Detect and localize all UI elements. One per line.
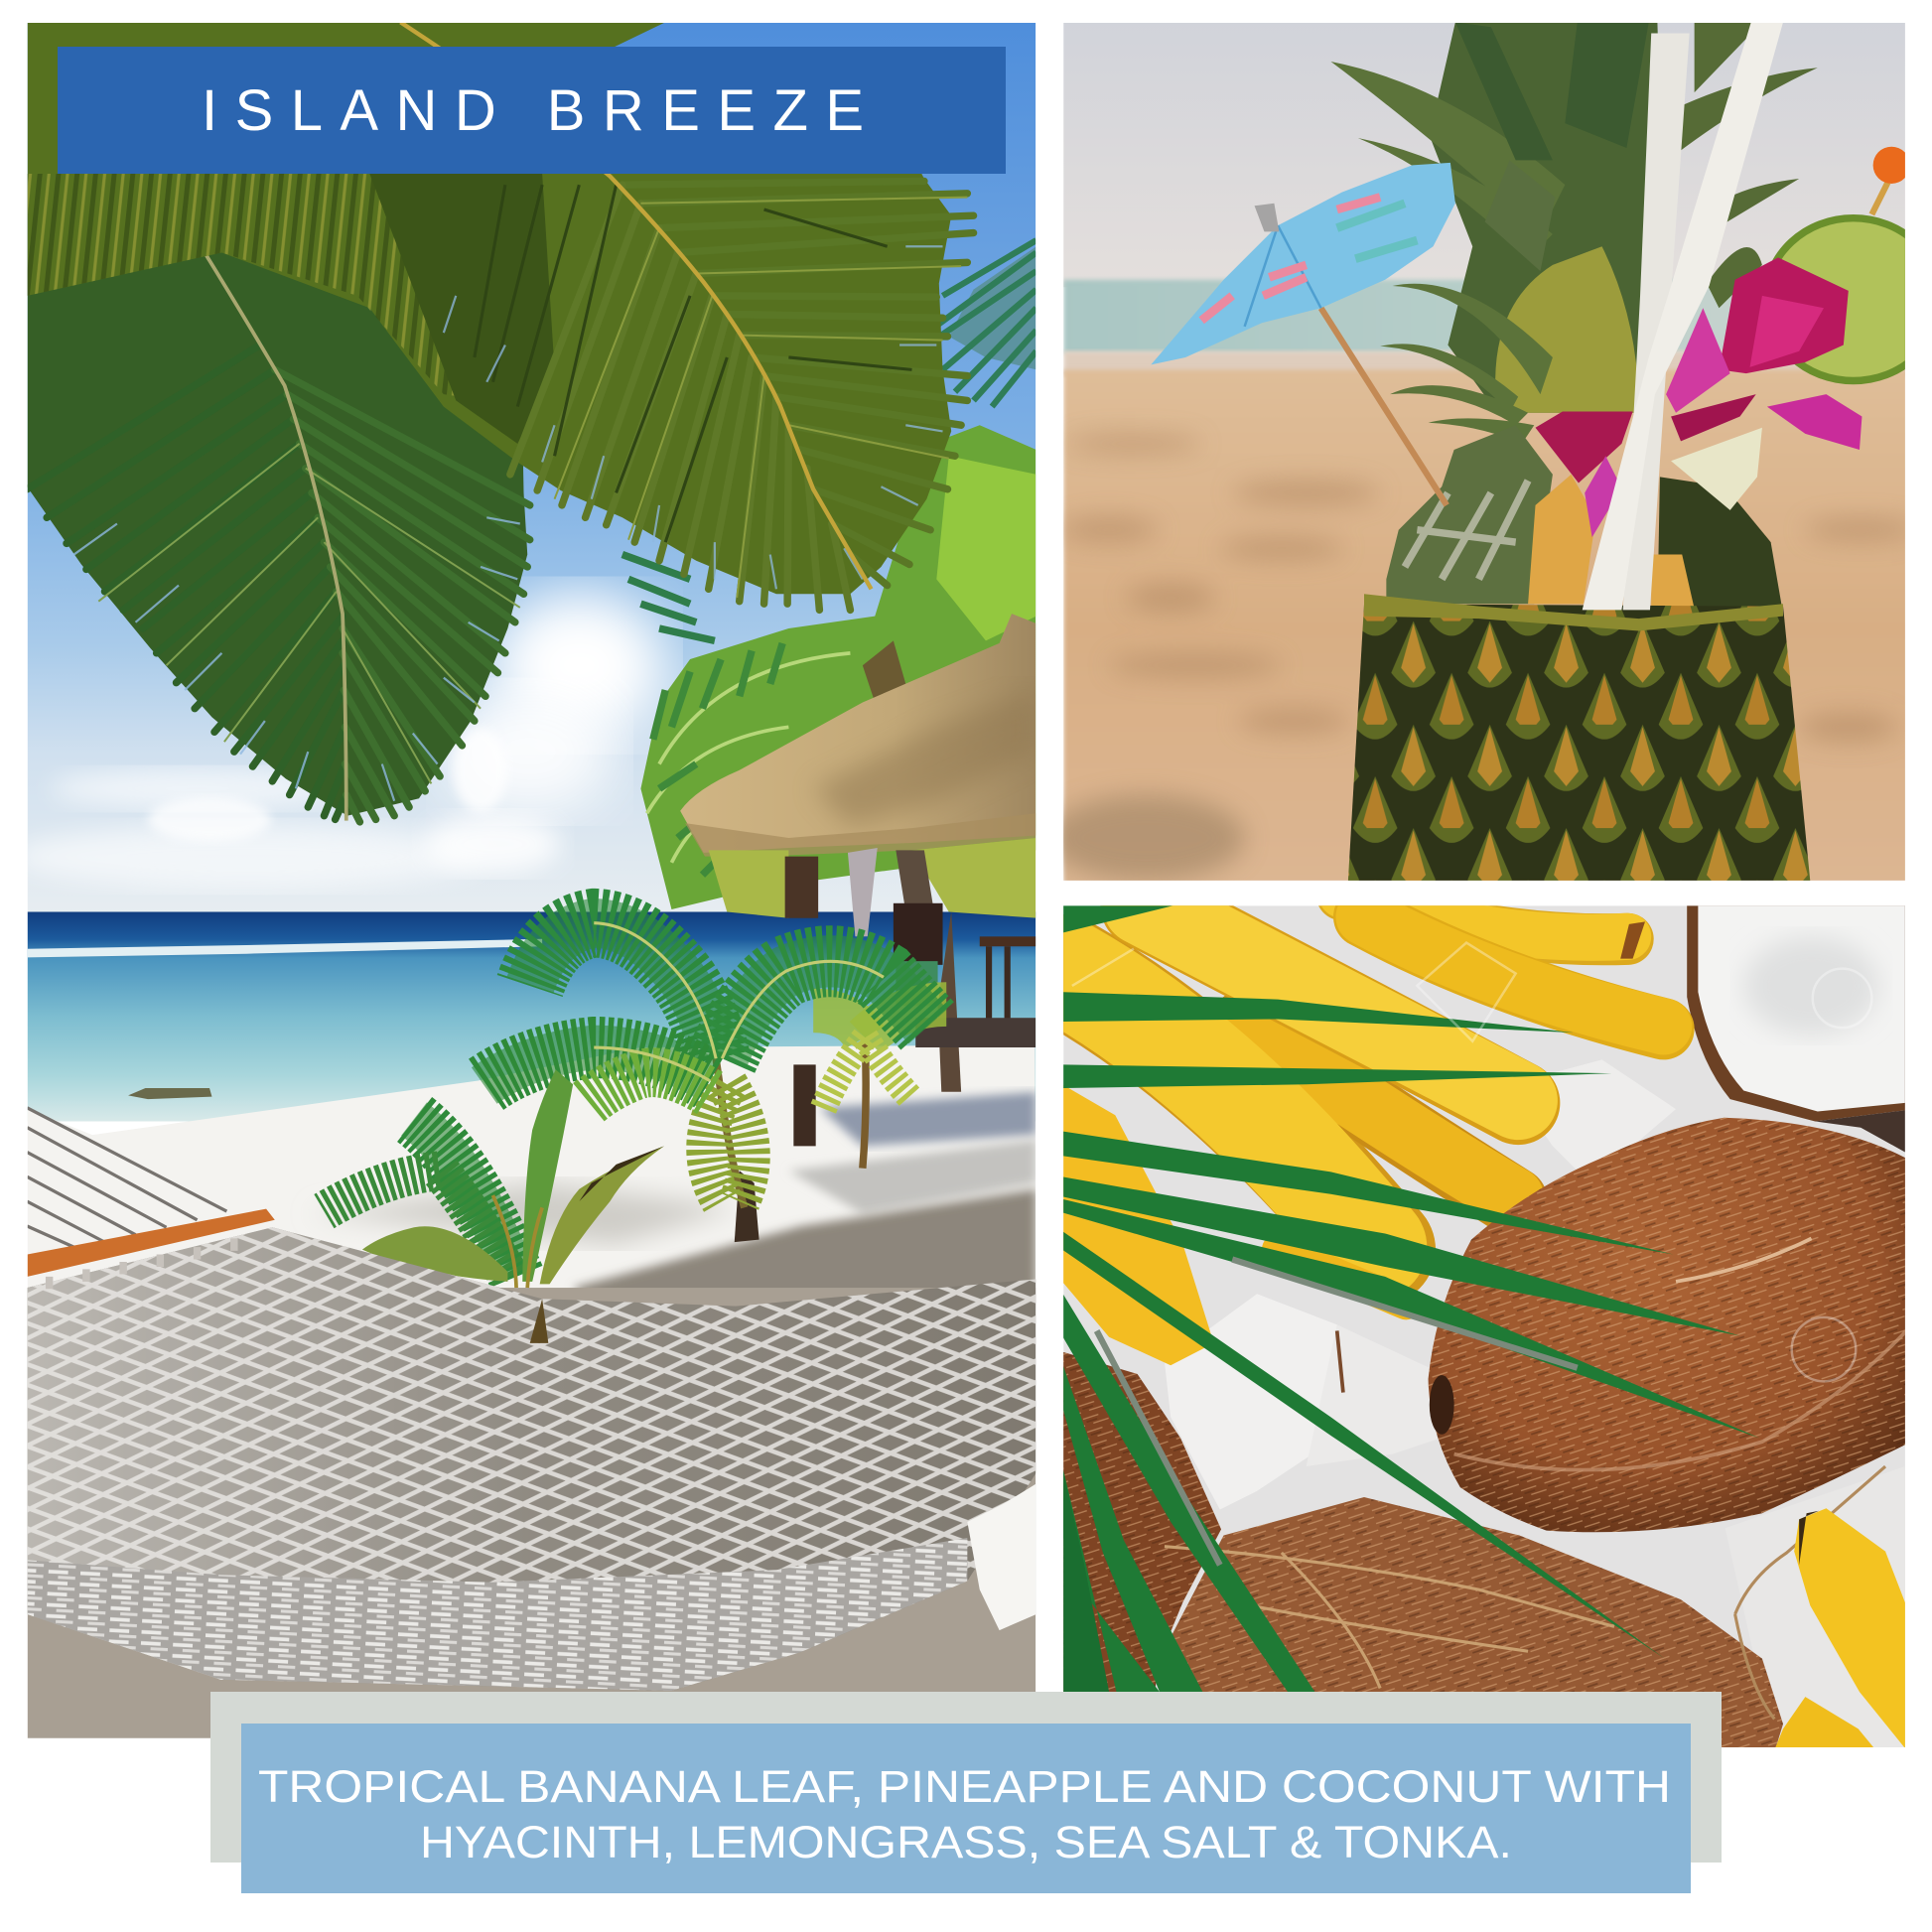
description text line 2: HYACINTH, LEMONGRASS, SEA SALT & TONKA. (420, 1817, 1512, 1867)
upper right frond behind (940, 237, 1036, 409)
sky slits in left frond (73, 517, 520, 801)
palm crown behind hut (863, 640, 905, 702)
cocktail stick with orange ball (1871, 147, 1910, 214)
title text: ISLAND BREEZE (202, 78, 864, 143)
big palm frond: left (27, 174, 530, 822)
left coconut (1062, 1352, 1221, 1701)
blurred sea (1063, 277, 1732, 354)
ocean (27, 911, 1037, 1121)
panel: banana and coconut photo (1062, 895, 1914, 1756)
young palm: right small (813, 1005, 946, 1169)
sand shadows (308, 1092, 1036, 1307)
lower coconut (1160, 1497, 1783, 1756)
fruit inside (1528, 475, 1695, 609)
lime slice garnish (1762, 214, 1932, 384)
grey backing panel (210, 1692, 1722, 1863)
grey sky (1063, 22, 1914, 287)
thatched hut roof (680, 614, 1036, 857)
leaf grey highlights (1097, 1260, 1578, 1565)
title banner (58, 47, 1006, 174)
hammock spreader bar (27, 1209, 275, 1277)
cord knots under bar (50, 1238, 234, 1289)
hammock strings (27, 1108, 226, 1247)
pineapple crown (1330, 22, 1818, 444)
small banana bottom right (1774, 1508, 1906, 1750)
sky slits in top frond (444, 246, 943, 589)
white sand (28, 1045, 1035, 1288)
description panel (241, 1724, 1691, 1893)
cracked coconut half (1687, 905, 1905, 1153)
small plant (324, 1069, 664, 1288)
watermark marks (1072, 943, 1871, 1381)
sand (1063, 369, 1914, 888)
panel: pineapple cocktail photo (1047, 22, 1932, 888)
young palm: centre (484, 923, 928, 1242)
big palm frond: top (27, 22, 974, 610)
white fabric knot (967, 1483, 1036, 1630)
large coconut (1429, 1118, 1906, 1532)
bananas (1062, 895, 1664, 1304)
panel: beach photo with palms and hammock (12, 22, 1037, 1743)
white surface (1063, 905, 1914, 1756)
paper umbrella stick (1321, 308, 1447, 505)
pineapple dome (1386, 425, 1553, 604)
background palms (622, 425, 1036, 909)
hammock net (27, 1227, 1036, 1691)
pineapple rim (1364, 594, 1783, 630)
surf line (27, 939, 542, 957)
hut posts and furniture (785, 848, 1036, 1146)
clouds (12, 592, 665, 889)
banana tip (1620, 921, 1645, 959)
palm leaves below hut (709, 838, 1036, 918)
rock in water (128, 1088, 211, 1099)
pale shoreline (1063, 351, 1914, 376)
description text line 1: TROPICAL BANANA LEAF, PINEAPPLE AND COCONUT WITH (258, 1761, 1671, 1812)
sand footprints (1047, 435, 1916, 881)
sky (27, 22, 1037, 914)
palm leaf blades (1062, 905, 1759, 1692)
pineapple body (1348, 604, 1810, 881)
paper umbrella (1151, 163, 1455, 364)
lower left banana (1062, 1084, 1214, 1365)
coconut flesh shards (1165, 1059, 1905, 1747)
orchid flower (1536, 257, 1862, 537)
lower sand (27, 1288, 1037, 1743)
straws (1583, 22, 1783, 610)
stray coconut fibre (1735, 1466, 1885, 1719)
